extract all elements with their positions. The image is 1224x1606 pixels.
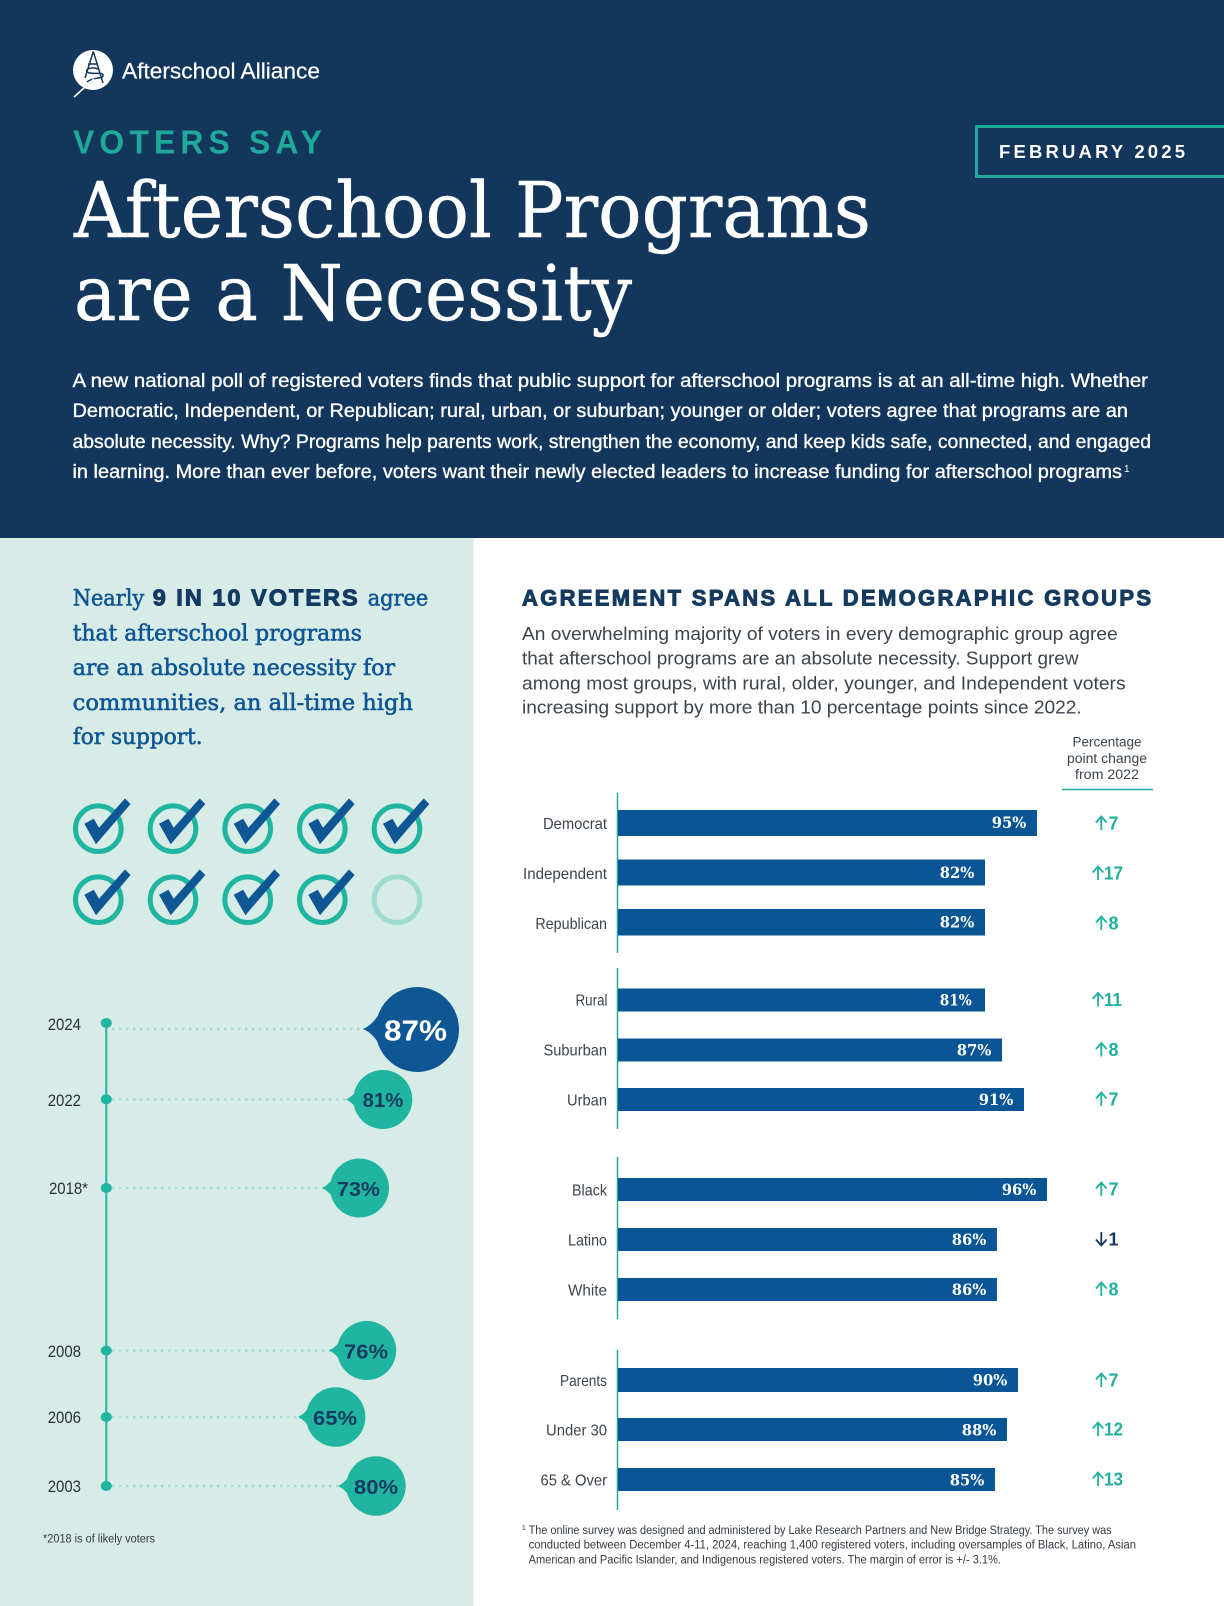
row: Black bbox=[572, 1178, 1119, 1201]
panel: demographic groups bbox=[522, 585, 1153, 1566]
row: Democrat: Democrat bbox=[543, 816, 608, 833]
row: Republican: Republican bbox=[535, 916, 607, 933]
row: Rural bbox=[576, 988, 1122, 1012]
point: 2024: 87% bbox=[384, 1016, 447, 1048]
title: Afterschool Programs bbox=[73, 167, 871, 256]
lead statement: for support. bbox=[73, 724, 203, 750]
row: Parents: 7 bbox=[1108, 1370, 1119, 1390]
kicker: voters say: VOTERS SAY bbox=[73, 123, 322, 161]
intro text: 1 bbox=[1124, 464, 1130, 475]
row: Rural: Rural bbox=[576, 992, 608, 1010]
row: White: 8 bbox=[1108, 1280, 1119, 1300]
point: 2018: 2018* bbox=[49, 1180, 89, 1198]
row: Republican bbox=[535, 909, 1119, 936]
intro text bbox=[72, 370, 1151, 483]
point: 2006 bbox=[48, 1387, 365, 1447]
footnote: 2018 likely voters: *2018 is of likely voters bbox=[43, 1534, 155, 1546]
row: Rural: 11 bbox=[1104, 990, 1122, 1010]
panel: left sidebar bbox=[0, 538, 474, 1606]
row: Latino: 86% bbox=[952, 1230, 986, 1249]
row: White bbox=[568, 1278, 1119, 1301]
row: Parents bbox=[560, 1368, 1119, 1392]
point: 2008: 76% bbox=[344, 1342, 388, 1364]
footnote: survey method: American and Pacific Islander, and Indigenous registered voters. The margin of error is +/- 3.1%. bbox=[529, 1554, 1001, 1566]
row: Suburban bbox=[544, 1038, 1119, 1062]
row: Republican: 82% bbox=[940, 913, 974, 932]
row: Independent bbox=[523, 860, 1123, 886]
point: 2003: 2003 bbox=[48, 1478, 81, 1496]
row: Latino: Latino bbox=[568, 1232, 607, 1250]
icons: nine of ten checks bbox=[76, 798, 429, 922]
row: Independent: Independent bbox=[523, 866, 608, 883]
row: White: 86% bbox=[952, 1280, 986, 1299]
row: Black: Black bbox=[572, 1182, 608, 1200]
row: Suburban: Suburban bbox=[544, 1042, 607, 1060]
row: Urban: 91% bbox=[979, 1090, 1013, 1109]
row: Black: 7 bbox=[1108, 1180, 1119, 1200]
row: Parents: 90% bbox=[973, 1370, 1007, 1390]
row: Independent: 17 bbox=[1104, 864, 1123, 884]
row: Latino bbox=[568, 1228, 1119, 1251]
row: 65 & Over: 85% bbox=[950, 1470, 984, 1490]
point: 2018: 73% bbox=[337, 1179, 380, 1201]
bar chart: geography bbox=[544, 968, 1122, 1129]
bar chart: race and ethnicity bbox=[568, 1157, 1119, 1319]
row: Under 30: 12 bbox=[1104, 1420, 1123, 1440]
point: 2022 bbox=[48, 1070, 412, 1129]
logo: Afterschool Alliance: Afterschool Alliance bbox=[122, 58, 320, 84]
description text: An overwhelming majority of voters in every demographic group agree bbox=[522, 623, 1118, 644]
row: 65 & Over bbox=[540, 1468, 1123, 1491]
row: Parents: Parents bbox=[560, 1373, 607, 1390]
bar chart: party bbox=[523, 793, 1123, 953]
timeline chart bbox=[48, 987, 459, 1516]
description text: among most groups, with rural, older, younger, and Independent voters bbox=[522, 672, 1126, 693]
point: 2006: 65% bbox=[313, 1408, 357, 1430]
date box: FEBRUARY 2025 bbox=[999, 141, 1185, 162]
lead statement: agree bbox=[368, 586, 428, 612]
row: Democrat bbox=[543, 810, 1119, 836]
row: Rural: 81% bbox=[940, 990, 972, 1010]
panel: header bbox=[0, 0, 1224, 538]
row: Urban bbox=[567, 1088, 1119, 1111]
row: Democrat: 95% bbox=[992, 813, 1026, 832]
point: 2003: 80% bbox=[354, 1477, 398, 1499]
row: Urban: Urban bbox=[567, 1092, 607, 1110]
point: 2006: 2006 bbox=[48, 1409, 81, 1427]
logo: Afterschool Alliance bbox=[73, 50, 320, 97]
point: 2022: 81% bbox=[363, 1090, 403, 1112]
row: Suburban: 8 bbox=[1108, 1040, 1119, 1060]
footnote: survey method: conducted between December 4-11, 2024, reaching 1,400 registered voters, including oversamples of Black, Latino, Asian bbox=[529, 1539, 1136, 1551]
row: Republican: 8 bbox=[1108, 914, 1119, 934]
date box bbox=[976, 126, 1224, 176]
heading: agreement: AGREEMENT SPANS ALL DEMOGRAPHIC GROUPS bbox=[522, 585, 1151, 610]
lead statement bbox=[73, 585, 428, 750]
title: are a Necessity bbox=[74, 250, 632, 339]
row: 65 & Over: 13 bbox=[1104, 1470, 1123, 1490]
point: 2008: 2008 bbox=[48, 1343, 81, 1361]
column header: percentage point change: Percentage bbox=[1072, 735, 1142, 750]
column header: percentage point change bbox=[1062, 735, 1153, 790]
bar chart: parents and age bbox=[540, 1350, 1123, 1510]
lead statement: are an absolute necessity for bbox=[73, 655, 395, 681]
description text: that afterschool programs are an absolute necessity. Support grew bbox=[522, 647, 1079, 668]
column header: percentage point change: point change bbox=[1067, 751, 1147, 766]
row: Urban: 7 bbox=[1108, 1090, 1119, 1110]
footnote: survey method: The online survey was designed and administered by Lake Research Partners and New Bridge Strategy. The survey was bbox=[529, 1525, 1112, 1537]
footnote: survey method bbox=[522, 1523, 1136, 1566]
column header: percentage point change: from 2022 bbox=[1075, 767, 1139, 782]
intro text: in learning. More than ever before, voters want their newly elected leaders to increase funding for afterschool programs bbox=[72, 461, 1122, 483]
row: Under 30: Under 30 bbox=[546, 1422, 607, 1440]
row: Democrat: 7 bbox=[1108, 814, 1119, 834]
description text bbox=[522, 623, 1126, 717]
row: 65 & Over: 65 & Over bbox=[540, 1472, 608, 1490]
row: Black: 96% bbox=[1002, 1180, 1036, 1199]
point: 2003 bbox=[48, 1456, 406, 1516]
intro text: A new national poll of registered voters finds that public support for afterschool programs is at an all-time high. Whether bbox=[72, 370, 1149, 392]
lead statement: communities, an all-time high bbox=[73, 690, 413, 716]
point: 2024: 2024 bbox=[48, 1016, 81, 1034]
point: 2022: 2022 bbox=[48, 1092, 81, 1110]
point: 2024 bbox=[48, 987, 459, 1072]
row: Suburban: 87% bbox=[957, 1040, 991, 1060]
lead statement: Nearly bbox=[73, 586, 145, 612]
lead statement: 9 IN 10 VOTERS bbox=[153, 585, 358, 611]
description text: increasing support by more than 10 percentage points since 2022. bbox=[522, 696, 1082, 717]
row: Latino: 1 bbox=[1108, 1230, 1119, 1250]
lead statement: that afterschool programs bbox=[73, 621, 362, 647]
row: Under 30 bbox=[546, 1418, 1123, 1441]
intro text: absolute necessity. Why? Programs help parents work, strengthen the economy, and keep kids safe, connected, and engaged bbox=[72, 431, 1151, 453]
point: 2018 bbox=[49, 1158, 389, 1218]
title bbox=[73, 167, 871, 339]
row: Under 30: 88% bbox=[962, 1420, 996, 1440]
point: 2008 bbox=[48, 1321, 396, 1380]
intro text: Democratic, Independent, or Republican; rural, urban, or suburban; younger or older; voters agree that programs are an bbox=[72, 400, 1128, 422]
row: White: White bbox=[568, 1282, 607, 1300]
footnote: survey method: 1 bbox=[522, 1523, 526, 1532]
row: Independent: 82% bbox=[940, 863, 974, 882]
